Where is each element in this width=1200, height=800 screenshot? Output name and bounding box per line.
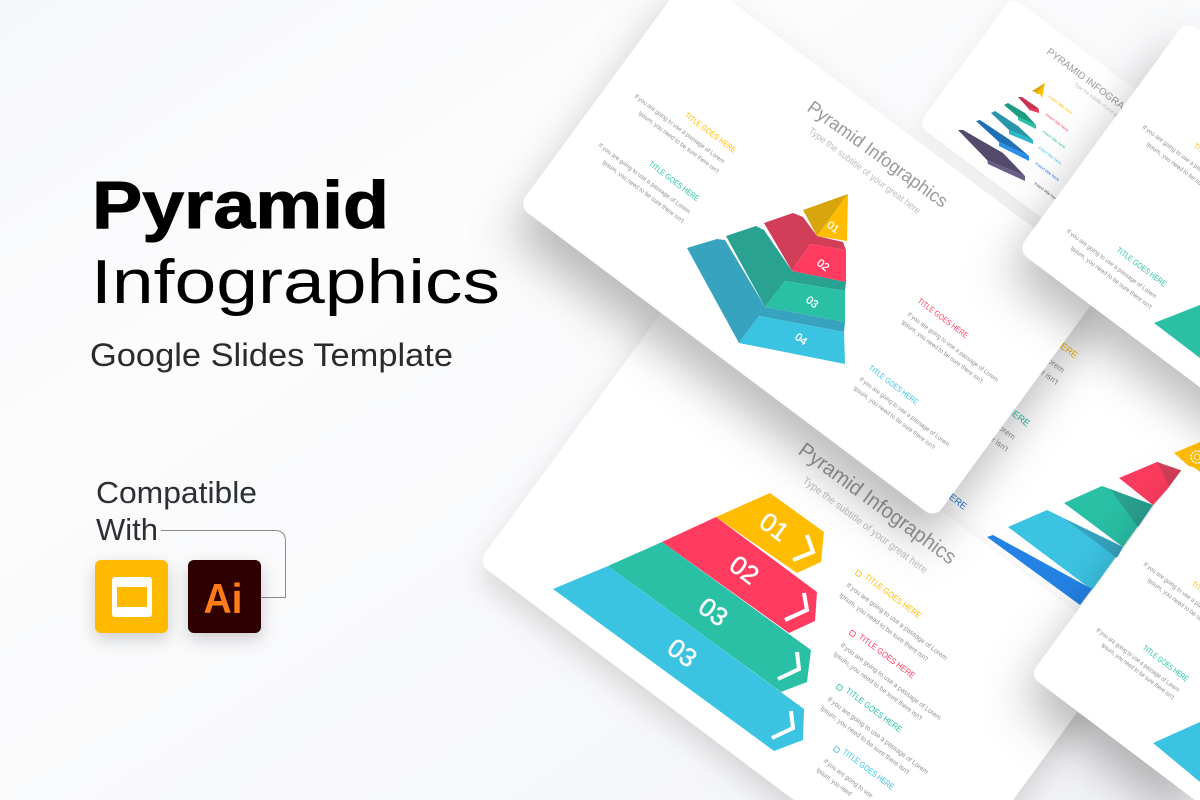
small card title: PYRAMID INFOGRAPHICS <box>1044 47 1151 131</box>
level 02: 02 <box>814 257 831 274</box>
ribbon legend: gold: TITLE GOES HERE <box>863 572 923 621</box>
small card labels: Insert title here <box>1037 145 1063 166</box>
ribbon: 01 gold <box>716 493 824 573</box>
with label: With <box>96 512 158 547</box>
text block: red: TITLE GOES HERE <box>916 296 970 340</box>
slide card: bottom right <box>1034 466 1200 800</box>
ribbon legend: red: Ipsum, you need to be sure there isn't <box>832 651 923 722</box>
green list titles and body fragments: use a passage of Lorem <box>943 383 1017 442</box>
slide card: top right <box>1018 21 1200 610</box>
small card labels: Insert title here <box>1047 94 1074 116</box>
ribbon legend: green: TITLE GOES HERE <box>844 686 904 735</box>
cyan pyramid fragment <box>1153 722 1200 782</box>
ribbon: 03 cyan: 03 <box>662 632 703 674</box>
ribbon legend: red: TITLE GOES HERE <box>857 632 917 681</box>
slide card: small pyramid (back) <box>918 0 1200 305</box>
gold list titles and body fragments <box>992 302 1080 387</box>
level 04 <box>687 239 845 364</box>
compatible with block <box>95 475 286 633</box>
small card labels: Insert title here <box>1033 181 1060 203</box>
connector line <box>161 530 286 598</box>
text block: cyan: If you are going to use a passage of Lorem <box>858 376 951 448</box>
ribbon legend: gold: If you are going to use a passage of Lorem <box>845 582 948 662</box>
ribbon card title: Pyramid Infographics <box>794 438 961 569</box>
icon: Google Slides <box>95 560 168 633</box>
small card labels: Insert title here <box>1034 161 1061 183</box>
ribbon: 02 red <box>662 517 817 633</box>
ribbon legend: cyan: TITLE GOES HERE <box>841 747 897 792</box>
title line: Infographics: Infographics <box>91 248 500 317</box>
text block: green: Ipsum, you need to be sure there isn't <box>1100 642 1175 701</box>
ribbon: 03 cyan <box>553 566 804 751</box>
green list titles and body fragments: TITLE GOES HERE <box>957 370 1032 429</box>
level 03 <box>726 226 846 322</box>
ribbon legend: red: If you are going to use a passage of Lorem <box>839 642 942 722</box>
ribbon legend: gold: Ipsum, you need to be sure there isn't <box>838 592 929 663</box>
ribbon: 03 green <box>608 542 811 692</box>
main card title: Pyramid Infographics <box>804 96 952 212</box>
subtitle: Google Slides Template: Google Slides Template <box>90 337 453 373</box>
title line: Pyramid: Pyramid <box>92 168 389 243</box>
green pyramid fragment <box>1154 305 1200 358</box>
stepped pyramid <box>987 442 1200 605</box>
3D pyramid chart <box>687 194 848 364</box>
text block: green: Ipsum, you need to be sure there isn't <box>601 159 685 225</box>
text block: green: If you are going to use a passage of Lorem <box>597 142 691 215</box>
text block: cyan: Ipsum, you need to be sure there isn't <box>852 385 936 451</box>
text block: gold: If you are going to use a passage of Lorem <box>633 93 726 165</box>
gold list titles and body fragments: TITLE GOES HERE <box>1005 302 1080 361</box>
slide card: ribbon pyramid (front-left) <box>483 305 1124 800</box>
small card labels <box>1033 94 1074 203</box>
text block: green: If you are going to use a passage of Lorem <box>1095 627 1181 694</box>
ribbon legend: green: If you are going to use a passage of Lorem <box>826 696 929 776</box>
ribbon: 01 gold: 01 <box>754 506 795 548</box>
icon: Adobe Illustrator <box>188 560 261 633</box>
ribbon legend: cyan <box>815 746 897 800</box>
small card subtitle: Type the subtitle of your great here <box>1073 82 1133 129</box>
ribbon legend: green: Ipsum, you need to be sure there isn't <box>819 705 910 776</box>
text block: green: Ipsum, you need to be sure there isn't <box>1069 245 1153 311</box>
ribbon card subtitle: Type the subtitle of your great here <box>800 476 929 576</box>
main card subtitle: Type the subtitle of your great here <box>806 126 922 217</box>
text block: red: If you are going to use a passage of Lorem <box>906 311 1000 384</box>
level 01 <box>803 194 848 241</box>
text block: cyan: TITLE GOES HERE <box>867 363 920 407</box>
small card labels: Insert title here <box>1041 129 1067 150</box>
text block: green: TITLE GOES HERE <box>647 159 701 203</box>
ribbon: 02 red: 02 <box>724 549 765 591</box>
gold list titles and body fragments: use a passage of Lorem <box>992 316 1066 375</box>
green list titles and body fragments <box>943 370 1032 454</box>
text block: red: Ipsum, you need to be sure there isn't <box>900 319 984 385</box>
text block: green: TITLE GOES HERE <box>1115 245 1168 289</box>
slide card: 3D pyramid (main) <box>519 0 1107 518</box>
green list titles and body fragments: be sure there isn't <box>954 408 1011 454</box>
level 01: 01 <box>824 219 841 236</box>
ribbon: 03 green: 03 <box>693 591 734 633</box>
text block: gold: TITLE GOES HERE <box>683 110 738 155</box>
small pyramid layers <box>958 83 1045 181</box>
text block: green: If you are going to use a passage of Lorem <box>1065 228 1158 300</box>
level 04: 04 <box>792 331 809 348</box>
level 03: 03 <box>803 294 820 311</box>
level 02 <box>764 213 846 282</box>
text block: gold: Ipsum, you need to be sure there isn't <box>637 110 720 175</box>
slide card: stepped pyramid with gear (behind) <box>894 200 1200 717</box>
small card labels: Insert title here <box>1044 112 1070 133</box>
gold list titles and body fragments: be sure there isn't <box>1004 341 1061 387</box>
compatible label: Compatible <box>96 475 257 510</box>
icon: Adobe Illustrator: Ai <box>204 575 242 622</box>
heading: Pyramid Infographics <box>90 168 500 373</box>
blue list title: TITLE GOES HERE <box>894 453 969 512</box>
